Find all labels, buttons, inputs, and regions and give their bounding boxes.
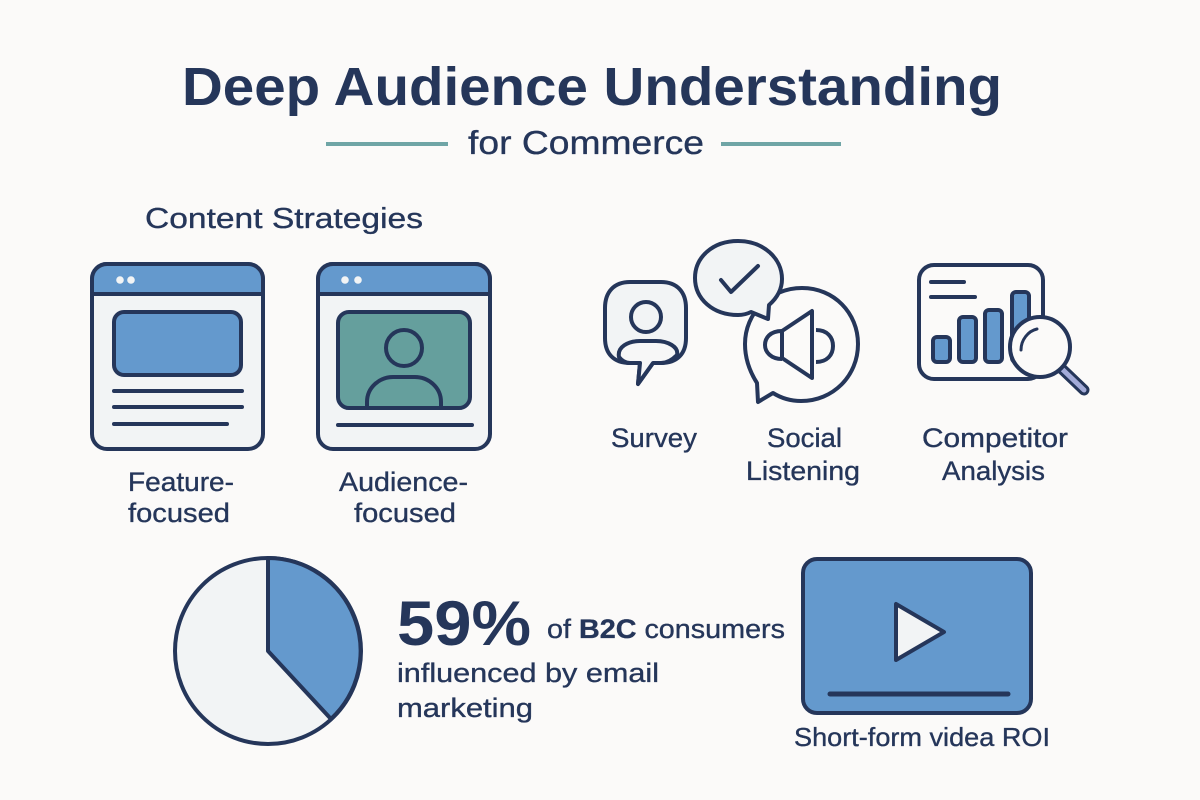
label: audience-focused: focused: [354, 498, 456, 528]
panel: audience-focused: [318, 264, 490, 528]
panel: survey: [605, 282, 698, 453]
icon: audience-focused browser window: [318, 264, 490, 449]
heading: content strategies: Content Strategies: [145, 203, 423, 235]
stat text: 59% of B2C consumers: influenced by email: [397, 658, 659, 688]
icon: survey speech bubble: [605, 282, 686, 384]
label: competitor analysis: Analysis: [942, 456, 1045, 486]
label: competitor analysis: Competitor: [922, 423, 1068, 453]
label: feature-focused: focused: [128, 498, 230, 528]
label: social listening: Social: [767, 423, 842, 453]
label: short-form video: Short-form videa ROI: [794, 722, 1050, 752]
label: social listening: Listening: [746, 456, 860, 486]
panel: social listening: [695, 241, 860, 486]
panel: feature-focused: [92, 264, 263, 528]
stat text: 59% of B2C consumers: [397, 589, 785, 723]
chart: pie 59%: [175, 558, 361, 744]
stat text: 59% of B2C consumers: 59%: [397, 589, 531, 659]
label: survey: Survey: [611, 423, 698, 453]
title: Deep Audience Understanding: [182, 57, 1002, 117]
icon: speaker speech bubble: [745, 288, 858, 402]
icon: video player: [803, 559, 1031, 713]
stat text: 59% of B2C consumers: marketing: [397, 693, 533, 723]
icon: check speech bubble: [695, 241, 782, 319]
stat text: 59% of B2C consumers: of B2C consumers: [547, 614, 785, 644]
label: audience-focused: Audience-: [339, 467, 468, 497]
panel: competitor analysis: [919, 265, 1084, 486]
icon: chart with magnifier: [919, 265, 1084, 390]
subtitle: for Commerce: [468, 124, 704, 161]
label: feature-focused: Feature-: [128, 467, 234, 497]
icon: feature-focused browser window: [92, 264, 263, 449]
